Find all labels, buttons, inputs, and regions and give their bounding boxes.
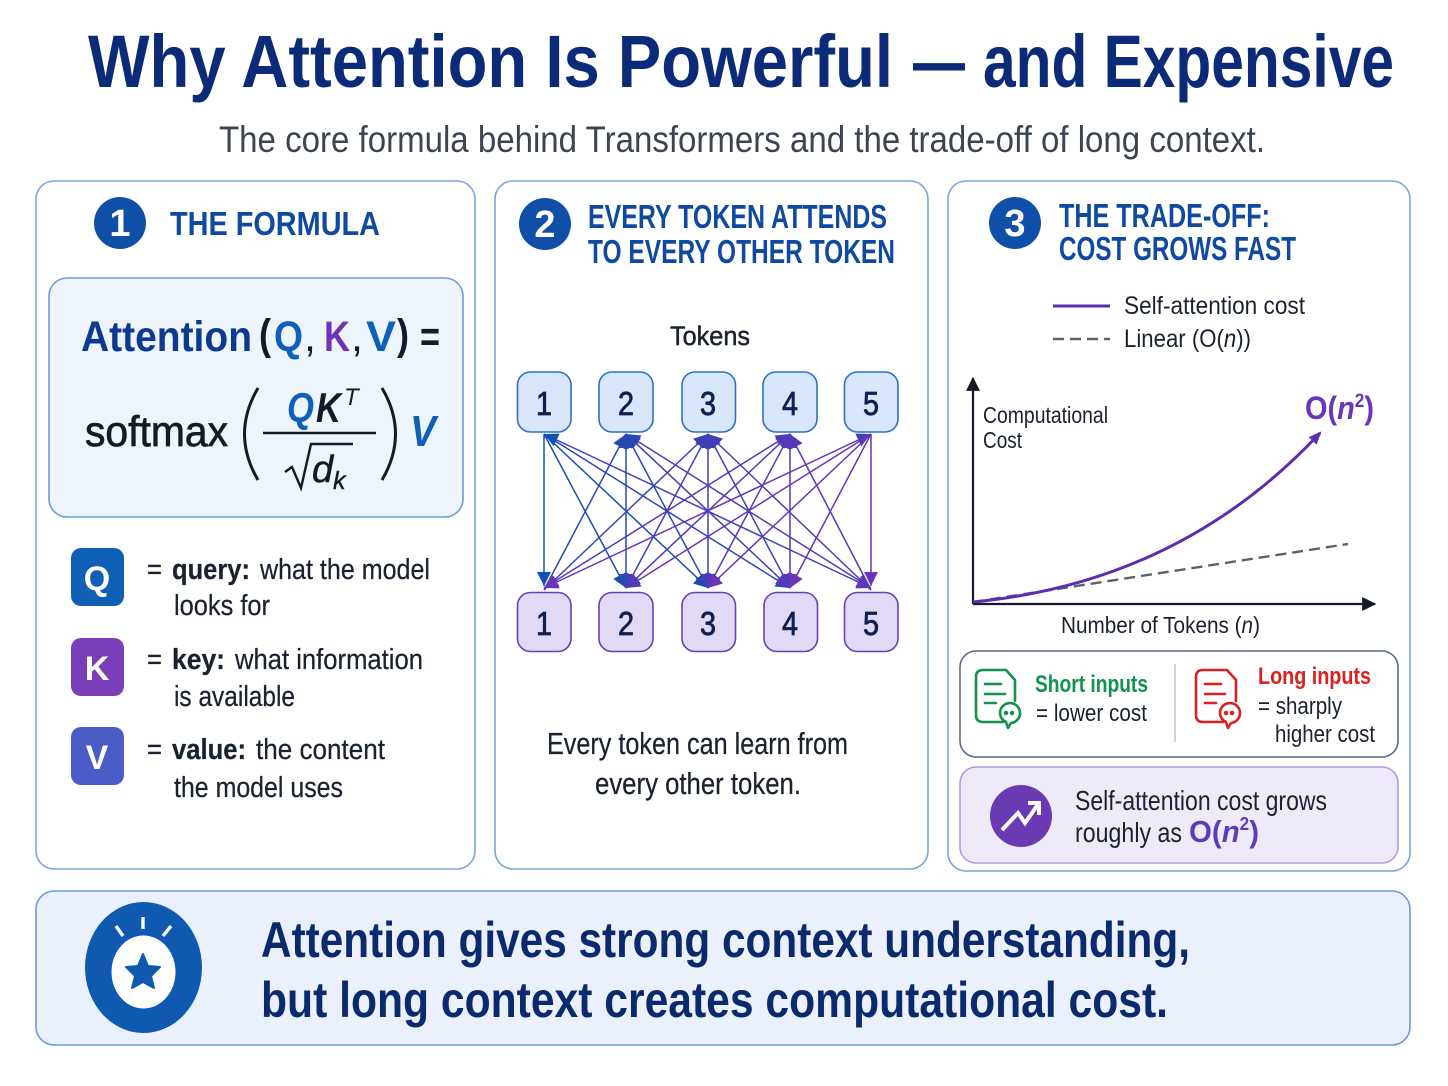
formula: left-hand side: K — [324, 313, 350, 361]
token row: inputs: 4 — [782, 385, 798, 422]
token row: outputs: 2 — [618, 605, 634, 642]
legend: K key: = — [147, 644, 162, 676]
formula: left-hand side: Attention — [81, 313, 252, 361]
line chart: cost vs tokens: Number of Tokens (n) — [1061, 612, 1260, 638]
takeaway text: Attention gives strong context understanding, — [261, 912, 1190, 968]
legend: V value: the model uses — [174, 772, 343, 804]
token row: inputs: 3 — [700, 385, 716, 422]
legend: V value: = — [147, 734, 162, 766]
caption — [547, 726, 848, 801]
legend: Q query: looks for — [174, 590, 270, 622]
legend: Q query: query: — [172, 554, 250, 586]
subtitle: The core formula behind Transformers and the trade-off of long context. — [219, 119, 1265, 160]
formula: left-hand side: V — [366, 313, 396, 361]
token row: outputs: 3 — [700, 605, 716, 642]
heading: the trade-off: COST GROWS FAST — [1059, 230, 1296, 267]
legend: Q query: Q — [84, 560, 110, 598]
formula box — [49, 278, 463, 517]
line chart: cost vs tokens: Cost — [983, 427, 1022, 453]
line chart: cost vs tokens: Computational — [983, 402, 1108, 428]
takeaway text — [261, 912, 1190, 1028]
caption: every other token. — [595, 766, 801, 801]
text: growth statement: Self-attention cost grows — [1075, 785, 1327, 816]
line chart: cost vs tokens: O(n — [1305, 390, 1357, 426]
token row: outputs: 5 — [863, 605, 879, 642]
text: growth statement: O(n — [1189, 814, 1241, 849]
callout: growth rate — [960, 767, 1398, 863]
arrows: all-to-all attention — [544, 434, 871, 590]
legend: V value: V — [86, 739, 109, 777]
formula: softmax fraction: V — [410, 407, 439, 456]
token row: inputs: 2 — [618, 385, 634, 422]
badge: step 3 — [989, 197, 1041, 249]
line chart: cost vs tokens — [973, 378, 1375, 638]
heading: the trade-off — [1059, 197, 1296, 267]
formula: left-hand side: ( — [259, 311, 272, 359]
legend: K key: what information — [234, 644, 423, 676]
text: long inputs: = sharply — [1258, 693, 1342, 720]
heading: the trade-off: THE TRADE-OFF: — [1059, 197, 1270, 234]
title — [88, 20, 1394, 103]
caption: Every token can learn from — [547, 726, 848, 761]
title: Why Attention Is Powerful — [88, 20, 893, 103]
legend: V value: the content — [256, 734, 385, 766]
legend: K key: is available — [174, 681, 295, 713]
formula: softmax fraction: d — [312, 449, 335, 491]
formula: softmax fraction: k — [333, 467, 347, 495]
formula: left-hand side: ) — [397, 311, 409, 359]
token row: outputs: 4 — [782, 605, 798, 642]
panel: takeaway banner — [36, 891, 1410, 1045]
text: short inputs — [1035, 671, 1148, 727]
text: growth statement: ) — [1249, 814, 1259, 849]
formula: left-hand side — [81, 311, 440, 361]
legend: Q query — [71, 548, 430, 622]
legend: K key — [71, 638, 423, 713]
formula: left-hand side: Q — [274, 313, 303, 361]
line chart: cost vs tokens: 2 — [1355, 391, 1364, 412]
takeaway text: but long context creates computational cost. — [261, 972, 1168, 1028]
legend: K key: key: — [172, 644, 225, 676]
icon: trending up — [990, 785, 1052, 847]
formula: softmax fraction: T — [344, 384, 361, 411]
text: long inputs: Long inputs — [1258, 663, 1371, 690]
formula: softmax fraction: softmax — [85, 408, 228, 456]
text: growth statement: 2 — [1240, 814, 1249, 834]
heading: every token attends — [588, 198, 895, 270]
heading: every token attends: TO EVERY OTHER TOKEN — [588, 233, 895, 270]
token row: outputs: 1 — [536, 605, 552, 642]
panel: the trade-off — [948, 181, 1410, 871]
formula: left-hand side: = — [420, 313, 440, 361]
chart legend — [1053, 292, 1305, 353]
formula: softmax fraction: K — [316, 384, 343, 431]
badge: step 1 — [94, 197, 146, 249]
token row: inputs — [518, 372, 898, 432]
token row: outputs — [518, 592, 898, 652]
heading: the formula: THE FORMULA — [170, 205, 380, 242]
heading: every token attends: EVERY TOKEN ATTENDS — [588, 198, 887, 235]
text: short inputs: = lower cost — [1036, 700, 1147, 727]
chart legend: Self-attention cost — [1124, 292, 1305, 320]
panel: every token attends — [495, 181, 928, 869]
legend: V value — [71, 727, 385, 804]
text: growth statement — [1075, 785, 1327, 849]
icon: long document — [1196, 670, 1240, 728]
formula: softmax fraction — [85, 384, 439, 495]
badge: step 2 — [519, 198, 571, 250]
token row: inputs: 5 — [863, 385, 879, 422]
badge: step 3: 3 — [1004, 203, 1026, 245]
line chart: cost vs tokens: ) — [1364, 390, 1374, 426]
legend: Q query: what the model — [259, 554, 430, 586]
text: short inputs: Short inputs — [1035, 671, 1148, 698]
label: tokens: Tokens — [670, 321, 750, 351]
text: growth statement: roughly as — [1075, 817, 1182, 848]
chart legend: Linear (O(n)) — [1124, 325, 1251, 353]
comparison box — [960, 651, 1398, 757]
legend: V value: value: — [172, 734, 246, 766]
legend: Q query: = — [147, 554, 162, 586]
formula: softmax fraction: Q — [287, 384, 314, 432]
formula: left-hand side: , — [304, 313, 316, 361]
panel: the formula — [36, 181, 475, 869]
icon: star with rays — [85, 902, 202, 1033]
legend: K key: K — [85, 650, 110, 688]
icon: short document — [976, 670, 1020, 728]
token row: inputs: 1 — [536, 385, 552, 422]
badge: step 2: 2 — [534, 204, 556, 246]
text: long inputs — [1258, 663, 1375, 748]
formula: left-hand side: , — [351, 313, 363, 361]
text: long inputs: higher cost — [1275, 721, 1375, 748]
badge: step 1: 1 — [109, 203, 131, 245]
title: — — [913, 20, 965, 103]
